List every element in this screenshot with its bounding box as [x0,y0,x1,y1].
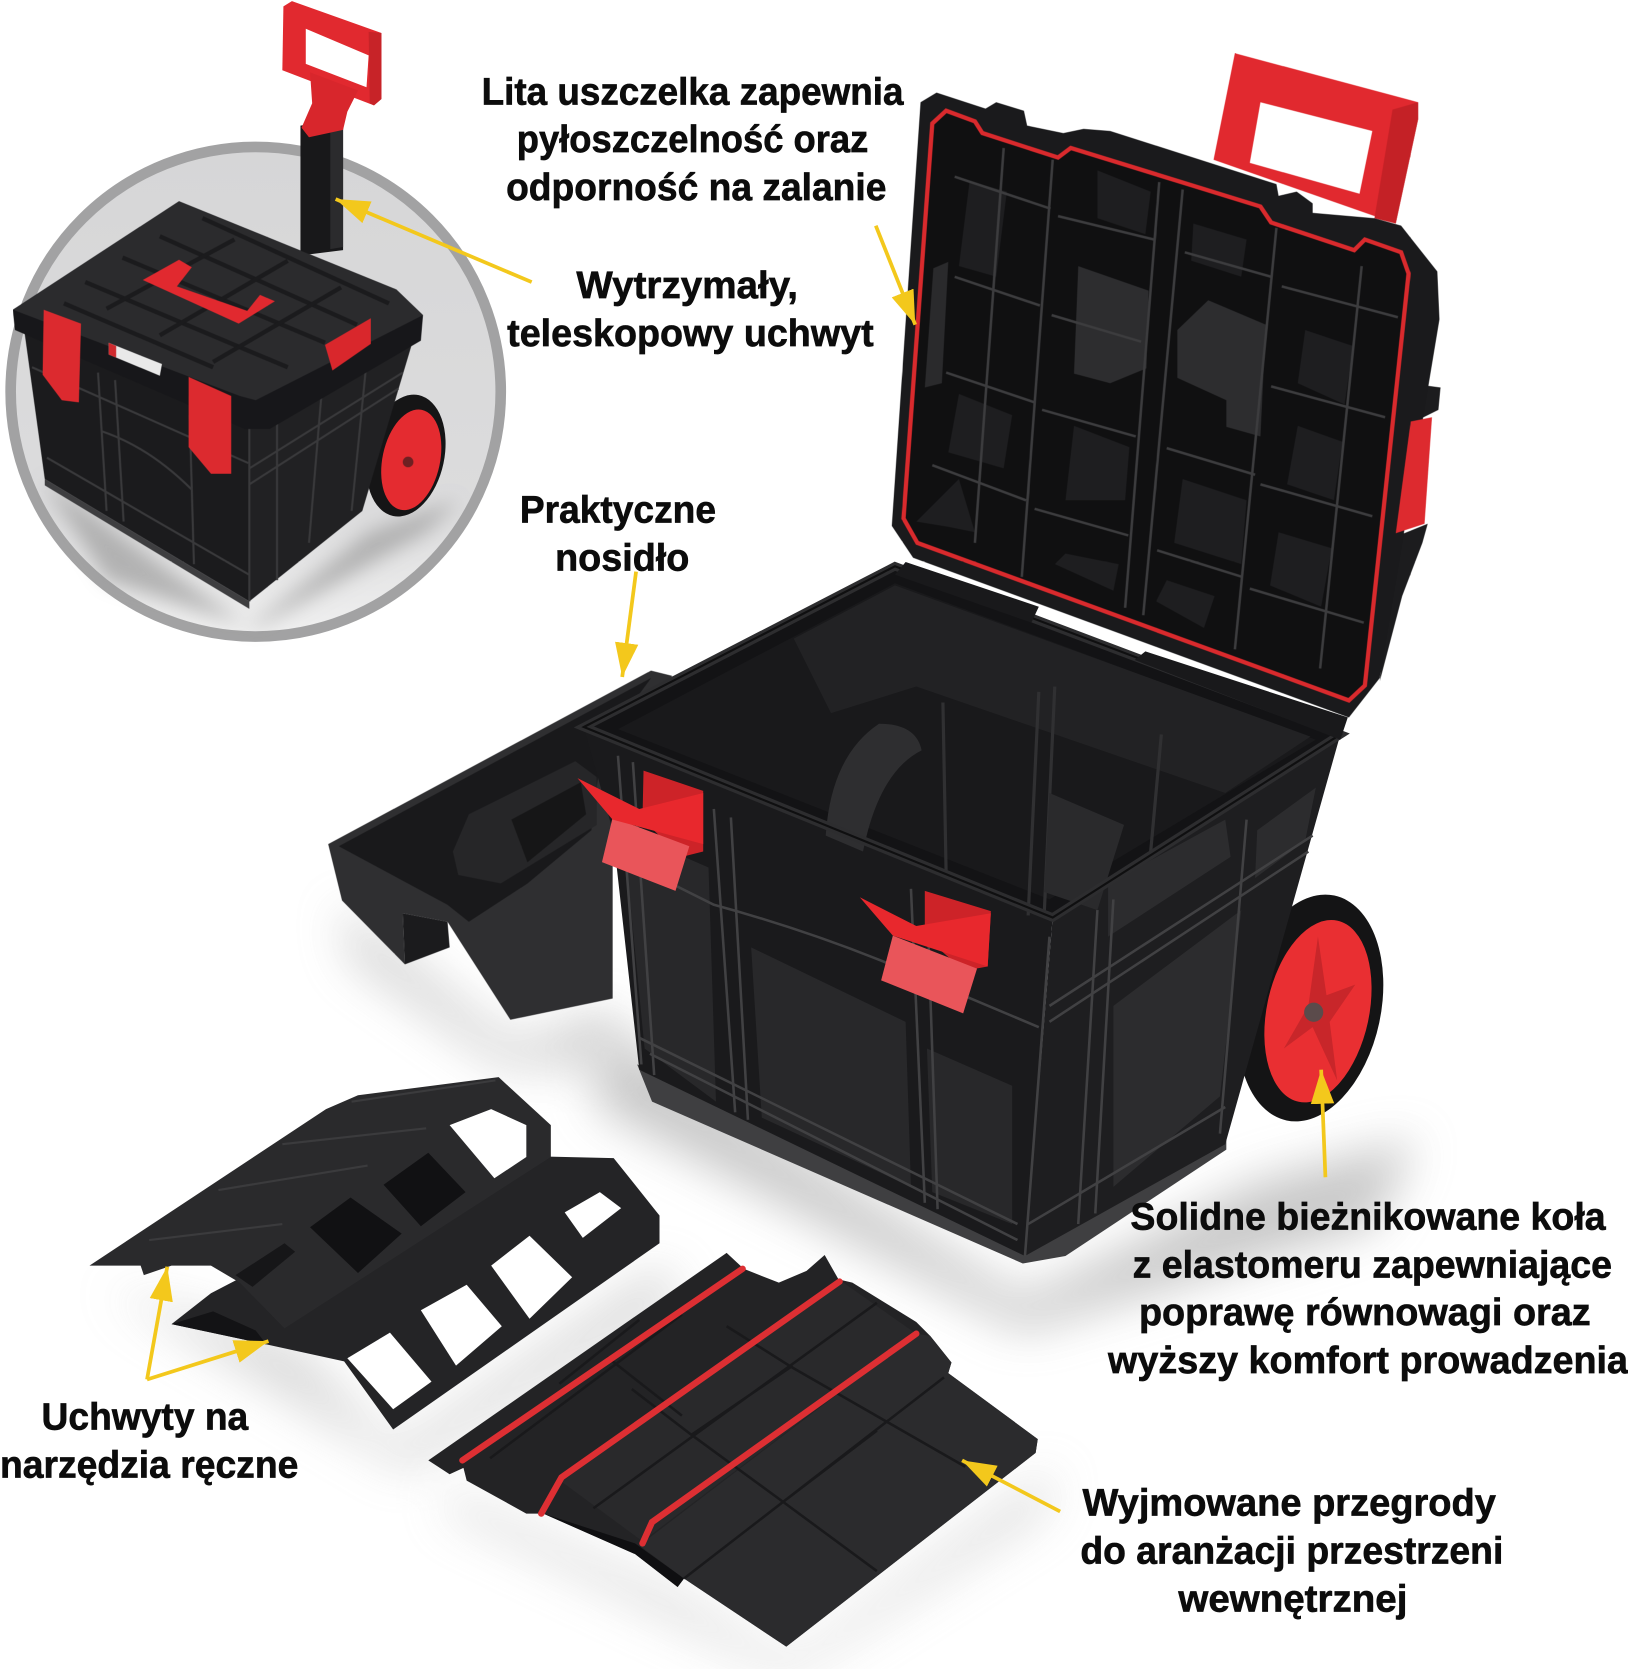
inset brand label [109,343,162,376]
right latch [860,891,991,1013]
rim [584,566,1340,918]
interior ribs and insert [943,687,1161,915]
arrow: wheel [1321,1070,1325,1177]
box front face [584,727,1053,1256]
text: dividers [1080,1482,1503,1621]
text: gasket: odporność na zalanie [506,166,886,209]
lid divider grid [932,148,1398,668]
text: wheels: Solidne bieżnikowane koła [1130,1195,1606,1238]
arrow: telescopic handle [336,199,532,282]
text: wheels: poprawę równowagi oraz [1139,1291,1591,1334]
inset lid [13,201,423,429]
inset lid carry handle [143,260,275,324]
panel: inset telescopic-handle view [11,1,501,637]
text: carrier [520,489,716,580]
box front panels [623,830,1012,1224]
divider stack [428,1253,1038,1647]
inset floor shadow [43,479,458,628]
text: gasket: Lita uszczelka zapewnia [482,70,904,113]
hand-tool holders [89,1077,660,1430]
divider creases [490,1303,965,1579]
arrow: dividers [962,1460,1060,1511]
inset side latch [325,318,371,370]
dark under-panel [543,1514,684,1587]
inset latches [43,310,231,474]
text: dividers: do aranżacji przestrzeni [1080,1530,1503,1573]
text: telescopic handle: teleskopowy uchwyt [507,312,874,355]
lid tow handle [1214,53,1418,224]
text: wheels: z elastomeru zapewniające [1133,1243,1612,1286]
big wheel [1218,881,1403,1135]
main latches [577,771,991,1013]
text: gasket [482,70,904,209]
text: gasket: pyłoszczelność oraz [517,118,868,161]
text: dividers: wewnętrznej [1177,1578,1407,1621]
arrow: front holder [147,1267,167,1379]
text: wheels: wyższy komfort prowadzenia [1107,1339,1628,1382]
red bands [462,1269,916,1543]
rear holder [172,1155,660,1430]
arrow: gasket [876,226,915,325]
lid side clips [1380,383,1440,681]
inset box body [23,325,418,609]
front board [639,1334,1038,1647]
main open lid with red gasket [892,53,1440,717]
lid grip [925,262,948,387]
lid compartment shading [916,170,1353,628]
text: carrier: nosidło [555,537,689,580]
lid interior [903,111,1409,700]
interior wheel well [826,724,922,852]
text: telescopic handle: Wytrzymały, [576,264,798,307]
red gasket [903,111,1409,700]
text: tool holders: Uchwyty na [42,1396,249,1439]
left latch [577,771,703,891]
inset disc [11,147,501,637]
base [637,1064,1226,1263]
arrow: rear holder [147,1341,268,1379]
removable dividers [428,1253,1038,1647]
inset telescopic handle [282,1,381,255]
box ribs [618,756,1313,1256]
middle board [561,1282,916,1541]
box interior [584,566,1340,918]
front holder [89,1077,551,1328]
back wall [618,583,1316,899]
text: tool holders [0,1396,298,1486]
text: carrier: Praktyczne [520,489,716,532]
soft floor shadows [107,905,1417,1669]
main box [584,562,1403,1263]
arrow: carrier [622,572,636,677]
text: wheels [1107,1195,1628,1382]
text: telescopic handle [507,264,874,355]
lid shell [892,93,1439,717]
box side face [1025,734,1340,1256]
arrows [147,199,1325,1511]
text: dividers: Wyjmowane przegrody [1082,1482,1497,1525]
tool carrier tray [328,671,672,1020]
inset wheel [356,387,456,524]
text: tool holders: narzędzia ręczne [0,1443,298,1486]
hinges [895,562,1348,740]
lid side latch [1396,417,1432,533]
